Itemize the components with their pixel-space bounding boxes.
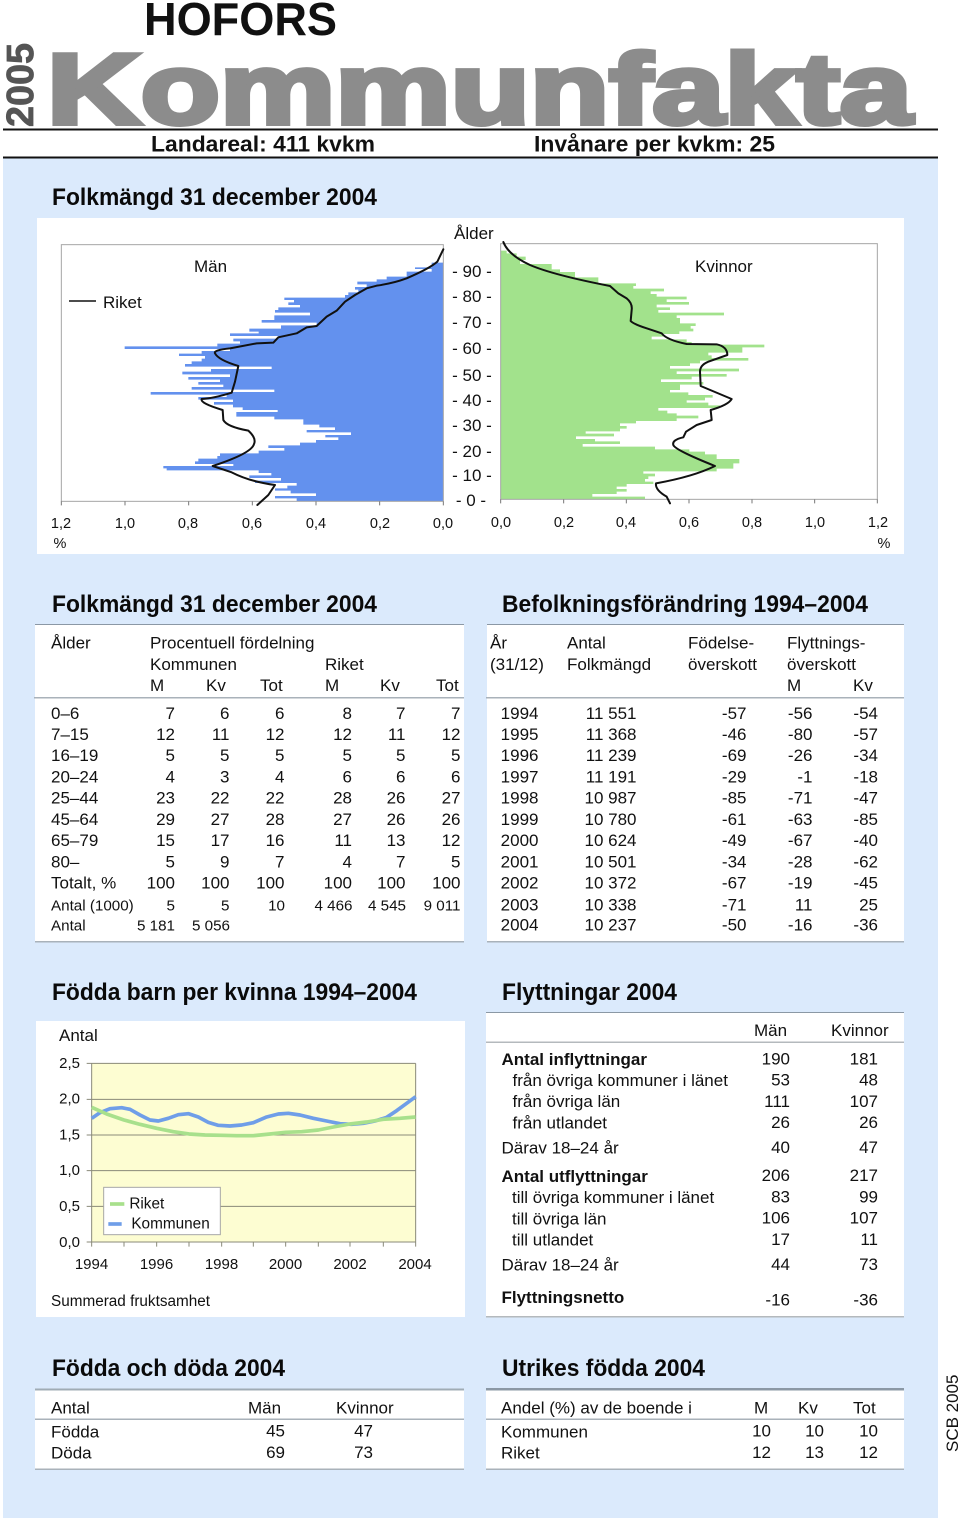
table rows: 2000 (501, 831, 538, 850)
panel: migration table (486, 1012, 904, 1318)
values: -16 (765, 1290, 790, 1310)
panel: births and deaths table: 69 (266, 1443, 285, 1462)
land area: Landareal: 411 kvkm (151, 132, 375, 156)
table header: M (150, 676, 164, 695)
age axis labels: - 0 - (456, 491, 486, 510)
table rows: 65–79 (51, 831, 98, 850)
table header: Kommunen (150, 655, 237, 674)
x axis labels (51, 515, 891, 552)
panel: foreign-born table: Tot (853, 1398, 876, 1418)
values: 48 (859, 1070, 878, 1090)
table rows: 5 181 (137, 918, 175, 934)
table rows: 10 624 (584, 831, 636, 850)
panel: foreign-born table: Andel (%) av de boende i (501, 1398, 692, 1418)
x axis labels: 0,2 (554, 515, 574, 531)
table rows: 5 (396, 746, 406, 765)
labels: från övriga kommuner i länet (512, 1071, 728, 1090)
table header: Procentuell fördelning (150, 634, 314, 652)
table rows: Antal (1000) (51, 898, 134, 914)
table rows: -67 (788, 831, 812, 850)
table rows: 16–19 (51, 746, 98, 765)
table rows: 1997 (501, 768, 538, 786)
table rows: 5 (166, 852, 175, 872)
table rows: 100 (377, 874, 406, 892)
age axis labels: - 30 - (452, 416, 492, 435)
table rows: -19 (788, 874, 812, 892)
table rows: 7–15 (51, 725, 89, 744)
table rows: 5 (343, 746, 352, 765)
table rows: 26 (442, 810, 460, 829)
labels: till övriga kommuner i länet (512, 1188, 714, 1207)
table rows: 27 (333, 810, 352, 829)
table rows: 11 239 (586, 746, 636, 765)
values: 111 (764, 1092, 790, 1111)
labels: Därav 18–24 år (502, 1138, 619, 1158)
values: 53 (771, 1070, 790, 1090)
age axis labels: - 60 - (452, 339, 492, 358)
heading: births per woman: Födda barn per kvinna 1994–2004 (52, 979, 418, 1006)
table rows (501, 704, 878, 934)
table header: Kvinnor (831, 1021, 889, 1040)
table header: (31/12) (490, 655, 544, 674)
side labels and legend (69, 257, 753, 312)
panel: births and deaths table: Födda (51, 1422, 100, 1442)
values: 107 (850, 1092, 878, 1111)
table rows: 100 (324, 874, 352, 892)
table rows: 28 (333, 788, 352, 808)
table rows: 12 (442, 831, 460, 850)
logo: Kommunfakta wordmark: Kommunfakta (47, 34, 914, 146)
table rows: 11 368 (586, 725, 636, 744)
table header (51, 634, 459, 695)
axis labels: 1,0 (59, 1162, 80, 1179)
panel: foreign-born table: M (754, 1398, 768, 1418)
table rows: -49 (722, 831, 746, 850)
table rows: 25–44 (51, 788, 98, 808)
panel: foreign-born table (486, 1388, 904, 1470)
x axis labels: 0,6 (679, 515, 699, 531)
table rows: 11 551 (586, 704, 636, 723)
table rows: 4 (166, 768, 175, 786)
table rows: 3 (220, 768, 230, 786)
side labels and legend: Män (194, 257, 227, 276)
table header: Födelse- (688, 634, 754, 652)
x axis labels: 1,2 (868, 515, 888, 531)
table rows: -28 (788, 852, 812, 872)
table rows: -62 (853, 852, 878, 872)
heading: migration: Flyttningar 2004 (502, 979, 678, 1006)
table rows: 4 466 (314, 898, 352, 914)
table rows: 7 (451, 704, 460, 723)
panel: foreign-born table: 12 (859, 1443, 878, 1462)
table rows: 5 056 (192, 918, 230, 934)
axis labels: 2004 (398, 1256, 432, 1273)
table rows: 2002 (501, 874, 538, 892)
table rows: 11 (212, 725, 230, 744)
values: 26 (771, 1113, 790, 1132)
table rows: 100 (256, 874, 284, 892)
table rows: 100 (201, 874, 230, 892)
values: 83 (771, 1188, 790, 1206)
side labels and legend: Kvinnor (695, 257, 753, 276)
side labels and legend: Riket (103, 293, 142, 312)
table rows: 9 011 (424, 898, 460, 914)
table rows: -26 (788, 746, 812, 765)
table rows: 7 (275, 852, 284, 872)
age axis labels: - 50 - (452, 366, 492, 385)
age axis labels: - 80 - (452, 287, 492, 306)
panel: births and deaths table: Kvinnor (336, 1398, 394, 1418)
panel: foreign-born table: 10 (805, 1422, 824, 1440)
axis labels: 2000 (269, 1256, 302, 1273)
table rows: -29 (722, 768, 746, 786)
values: 26 (859, 1113, 878, 1132)
header (0, 0, 938, 158)
table rows: 15 (156, 831, 175, 850)
table rows: -71 (788, 788, 812, 808)
table rows: 7 (396, 852, 406, 872)
panel: foreign-born table: 10 (859, 1422, 878, 1440)
table header: Tot (260, 676, 283, 695)
panel: births and deaths table: 45 (266, 1422, 285, 1440)
table rows: 6 (343, 768, 352, 786)
values: 206 (762, 1166, 790, 1185)
table rows: 16 (266, 831, 284, 850)
table rows: 26 (387, 788, 406, 808)
table rows: 2003 (501, 896, 538, 914)
values: 190 (762, 1050, 790, 1068)
panel: foreign-born table: 13 (805, 1443, 824, 1462)
table rows: 5 (221, 898, 230, 914)
table header: Flyttnings- (787, 634, 865, 652)
table rows: 5 (451, 852, 460, 872)
line: Riket (92, 1107, 416, 1136)
panel: population change table (486, 624, 904, 942)
table rows: 22 (266, 788, 284, 808)
table rows: -50 (722, 916, 746, 934)
table rows: -16 (788, 916, 812, 934)
labels: till övriga län (512, 1210, 606, 1228)
heading: population pyramid: Folkmängd 31 december 2004 (52, 184, 378, 211)
panel: foreign-born table: Kommunen (501, 1422, 588, 1442)
table header: Kv (206, 676, 226, 695)
values: -36 (853, 1290, 878, 1310)
panel: births and deaths table: Döda (51, 1444, 92, 1462)
labels: till utlandet (512, 1230, 594, 1250)
table rows: 5 (275, 746, 284, 765)
panel: foreign-born table: 10 (752, 1422, 771, 1440)
table rows: 4 (343, 852, 352, 872)
table rows: 26 (387, 810, 406, 829)
table rows: -45 (853, 874, 878, 892)
line: Kommunen (92, 1097, 416, 1126)
table rows: 4 (275, 768, 284, 786)
table rows: 7 (166, 704, 175, 723)
values: 73 (859, 1255, 878, 1274)
panel: fertility chart (36, 1021, 465, 1317)
table rows: 27 (211, 810, 230, 829)
line: Riket men (202, 249, 443, 505)
table rows: 11 (795, 896, 812, 914)
panel: births and deaths table (35, 1388, 464, 1470)
table rows: Antal (51, 918, 86, 934)
table rows: -85 (853, 810, 878, 829)
age axis labels: - 10 - (452, 466, 492, 485)
table header: överskott (787, 655, 856, 674)
table rows: 11 (388, 725, 406, 744)
table rows: -63 (788, 810, 812, 829)
x axis labels: 1,2 (51, 516, 71, 532)
table rows: 10 501 (584, 852, 636, 872)
chart: men bars (61, 245, 443, 505)
labels (502, 1050, 728, 1307)
table rows: 4 545 (368, 898, 406, 914)
values: 11 (860, 1230, 878, 1249)
values: 44 (771, 1255, 790, 1274)
table rows: -56 (788, 704, 812, 723)
table rows: 5 (167, 898, 175, 914)
table rows: 6 (451, 768, 460, 786)
table rows: 10 780 (584, 810, 636, 829)
table rows: -36 (853, 916, 878, 934)
table rows: -57 (722, 704, 746, 723)
values: 40 (771, 1138, 790, 1157)
panel: foreign-born table: Kv (798, 1398, 818, 1418)
table rows: 10 372 (584, 874, 636, 892)
table rows: 1999 (501, 810, 538, 829)
age axis labels: - 40 - (452, 391, 492, 410)
table header (490, 634, 873, 695)
chart: women bars (501, 242, 877, 503)
population density: Invånare per kvkm: 25 (534, 132, 775, 156)
x axis labels: 1,0 (805, 515, 825, 531)
x axis labels: 0,8 (742, 515, 762, 531)
values: 47 (859, 1138, 878, 1157)
table rows: 17 (211, 831, 230, 850)
table header: Tot (436, 676, 459, 695)
axis labels (59, 1026, 432, 1273)
table rows: -18 (853, 768, 878, 786)
table rows: 0–6 (51, 704, 79, 723)
labels: från övriga län (512, 1092, 620, 1111)
table rows: 12 (266, 725, 284, 744)
table rows: 12 (156, 725, 175, 744)
table rows: 23 (156, 788, 175, 808)
values: 99 (859, 1188, 878, 1206)
table rows: 11 (334, 831, 352, 850)
axis labels: 0,5 (59, 1198, 80, 1215)
table rows: 10 237 (584, 916, 636, 934)
table rows: 6 (396, 768, 406, 786)
table rows: 10 (268, 898, 285, 914)
panel: births and deaths table: Män (248, 1398, 281, 1418)
x axis labels: 0,4 (616, 515, 636, 531)
table rows: -61 (722, 810, 746, 829)
table header: M (325, 676, 339, 695)
axis labels: 2,0 (59, 1090, 80, 1108)
table header: Män (754, 1021, 787, 1040)
axis labels: 2002 (333, 1256, 367, 1273)
table rows: 12 (333, 725, 352, 744)
panel: age table (34, 624, 464, 942)
axis labels: 1998 (205, 1256, 238, 1273)
table rows: -46 (722, 725, 746, 744)
line chart plot (87, 1063, 416, 1247)
axis labels: 1,5 (59, 1126, 80, 1144)
table rows: 11 191 (586, 768, 636, 786)
table rows: -57 (853, 725, 878, 744)
axis labels: Antal (59, 1026, 98, 1045)
table rows: 9 (220, 852, 230, 872)
x axis labels: % (54, 536, 67, 552)
legend: Riket (129, 1196, 165, 1213)
x axis labels: 0,0 (491, 515, 511, 531)
table rows: -47 (853, 788, 878, 808)
legend (104, 1187, 220, 1235)
heading: age table: Folkmängd 31 december 2004 (52, 591, 378, 618)
table rows: 29 (156, 810, 175, 829)
age axis labels: Ålder (454, 224, 494, 243)
table header: Riket (325, 655, 364, 674)
table rows: -1 (797, 768, 812, 786)
table header: Antal (567, 634, 606, 652)
labels: Därav 18–24 år (502, 1256, 619, 1274)
axis labels: 2,5 (59, 1055, 80, 1072)
table rows: 10 338 (584, 896, 636, 914)
table rows: 8 (343, 704, 352, 723)
table rows: 6 (275, 704, 284, 723)
table rows: 1995 (501, 725, 538, 744)
footnote: Summerad fruktsamhet (51, 1293, 211, 1310)
table rows: 20–24 (51, 768, 98, 786)
x axis labels: 1,0 (115, 516, 135, 532)
table rows: -80 (788, 725, 812, 744)
table rows: 100 (432, 874, 460, 892)
table rows: -69 (722, 746, 746, 765)
legend: Kommunen (131, 1215, 210, 1232)
table rows: 13 (387, 831, 406, 850)
labels: Antal inflyttningar (502, 1050, 647, 1069)
table rows: -67 (722, 874, 746, 892)
table rows: -40 (853, 831, 878, 850)
panel: foreign-born table: Riket (501, 1444, 540, 1462)
table rows: 7 (396, 704, 406, 723)
labels: Flyttningsnetto (502, 1288, 624, 1307)
table rows (51, 704, 460, 934)
x axis labels: 0,2 (370, 516, 390, 532)
year label: 2005: 2005 (0, 43, 42, 127)
labels: Antal utflyttningar (502, 1167, 648, 1186)
axis labels: 1996 (140, 1256, 173, 1273)
table rows: 22 (211, 788, 230, 808)
x axis labels: 0,8 (178, 516, 198, 532)
panel: population pyramid (37, 218, 904, 554)
values: 217 (850, 1166, 878, 1185)
table header: M (787, 676, 801, 695)
x axis labels: % (878, 536, 891, 552)
table rows: 2004 (501, 916, 538, 934)
table rows: -71 (722, 896, 746, 914)
x axis labels: 0,4 (306, 516, 326, 532)
table rows: 27 (442, 788, 460, 808)
table rows: 28 (266, 810, 284, 829)
table header: Ålder (51, 634, 91, 652)
table rows: 6 (220, 704, 230, 723)
heading: foreign-born: Utrikes födda 2004 (502, 1355, 706, 1382)
table header: Folkmängd (567, 655, 651, 674)
age axis labels: - 90 - (452, 262, 492, 281)
table rows: 5 (451, 746, 460, 765)
values (762, 1050, 878, 1310)
table rows: 25 (859, 896, 878, 914)
table rows: Totalt, % (51, 874, 116, 892)
labels: från utlandet (512, 1114, 607, 1132)
table rows: -54 (853, 704, 878, 723)
table header: Kv (853, 676, 873, 695)
heading: births and deaths: Födda och döda 2004 (52, 1355, 286, 1382)
values: 17 (771, 1230, 790, 1249)
table header: År (490, 634, 507, 652)
x axis labels: 0,6 (242, 516, 262, 532)
table rows: 1994 (501, 704, 538, 723)
table rows: 100 (147, 874, 175, 892)
line: Riket women (503, 242, 732, 503)
table rows: 12 (442, 725, 460, 744)
table header: överskott (688, 655, 757, 674)
x axis labels: 0,0 (433, 516, 453, 532)
table rows: 45–64 (51, 810, 98, 829)
axis labels: 0,0 (59, 1234, 80, 1251)
values: 181 (850, 1050, 878, 1068)
panel: births and deaths table: 73 (354, 1443, 373, 1462)
table rows: 5 (220, 746, 230, 765)
table rows: 10 987 (584, 788, 636, 808)
heading: population change: Befolkningsförändring 1994–2004 (502, 591, 869, 618)
values: 106 (762, 1208, 790, 1228)
table rows: 80– (51, 852, 80, 872)
panel: births and deaths table: 47 (354, 1422, 373, 1440)
panel: foreign-born table: 12 (752, 1443, 771, 1462)
table rows: 2001 (501, 852, 538, 872)
age axis labels (452, 224, 494, 510)
table rows: 5 (166, 746, 175, 765)
table rows: 1998 (501, 788, 538, 808)
table rows: -34 (853, 746, 878, 765)
age axis labels: - 70 - (452, 313, 492, 332)
table rows: 1996 (501, 746, 538, 765)
table header: Kv (380, 676, 400, 695)
values: 107 (850, 1208, 878, 1228)
table rows: -85 (722, 788, 746, 808)
panel: births and deaths table: Antal (51, 1398, 90, 1418)
axis labels: 1994 (75, 1256, 108, 1273)
table rows: -34 (722, 852, 746, 872)
age axis labels: - 20 - (452, 442, 492, 461)
